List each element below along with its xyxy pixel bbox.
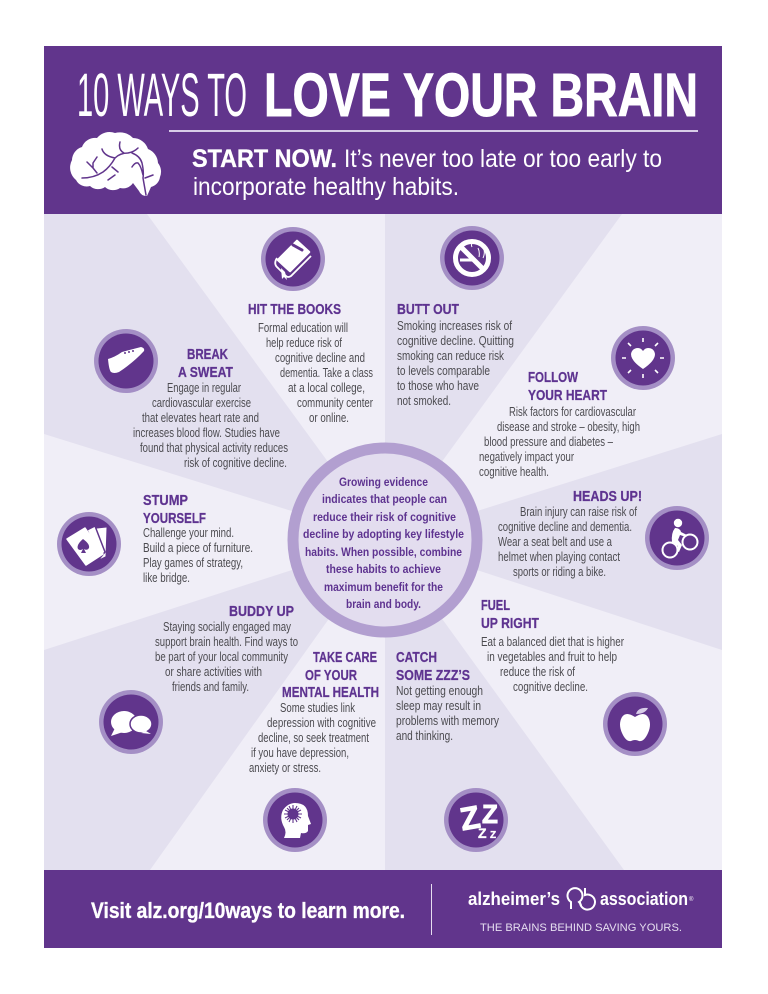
- center text: Growing evidence: [339, 477, 428, 489]
- body text: found that physical activity reduces: [140, 441, 288, 455]
- body text: that elevates heart rate and: [142, 411, 259, 425]
- heading: [178, 347, 233, 381]
- heading: STUMP: [143, 493, 188, 509]
- body text: anxiety or stress.: [249, 761, 321, 775]
- background sunburst panel: [44, 214, 722, 870]
- body text: Formal education will: [258, 321, 348, 335]
- body text: Not getting enough: [396, 684, 483, 698]
- logo: alzheimer's association: THE BRAINS BEHIND SAVING YOURS.: [480, 922, 682, 934]
- body text: Smoking increases risk of: [397, 319, 512, 333]
- body text: cognitive health.: [479, 465, 549, 479]
- icon: zzz: Z: [457, 799, 483, 837]
- icon: apple: [603, 692, 667, 756]
- center text: these habits to achieve: [326, 564, 441, 576]
- subtitle: [192, 145, 662, 201]
- body text: Brain injury can raise risk of: [520, 505, 637, 519]
- heading: BUTT OUT: [397, 302, 459, 318]
- subtitle: START NOW.: [192, 145, 337, 173]
- heading: MENTAL HEALTH: [282, 685, 379, 701]
- body text: in vegetables and fruit to help: [487, 650, 617, 664]
- body text: cognitive decline. Quitting: [397, 334, 514, 348]
- center text: decline by adopting key lifestyle: [303, 529, 464, 541]
- icon: zzz: Z: [490, 830, 496, 841]
- body text: helmet when playing contact: [498, 550, 620, 564]
- heading: [481, 598, 539, 632]
- panel: butt out: [397, 226, 514, 408]
- body text: [258, 321, 373, 425]
- body text: or share activities with: [165, 665, 262, 679]
- panel: stump yourself: [57, 493, 253, 585]
- body text: decline, so seek treatment: [258, 731, 369, 745]
- heading: HEADS UP!: [573, 489, 642, 505]
- body text: cognitive decline and dementia.: [498, 520, 632, 534]
- panel: follow your heart: [479, 326, 675, 479]
- body text: cardiovascular exercise: [152, 396, 251, 410]
- body text: [397, 319, 514, 408]
- body text: to levels comparable: [397, 364, 490, 378]
- body text: [249, 701, 376, 775]
- icon: head with burst: [263, 788, 327, 852]
- center text: reduce their risk of cognitive: [313, 512, 456, 524]
- icon: brain: [70, 132, 161, 196]
- body text: depression with cognitive: [267, 716, 376, 730]
- heading: BREAK: [187, 347, 228, 363]
- subtitle: It’s never too late or too early to: [344, 145, 662, 173]
- body text: cognitive decline and: [275, 351, 365, 365]
- heading: OF YOUR: [305, 668, 357, 684]
- panel: heads up: [498, 489, 709, 579]
- heading: CATCH: [396, 650, 437, 666]
- body text: [479, 405, 640, 479]
- icon: shoe: [94, 329, 158, 393]
- center text: habits. When possible, combine: [305, 547, 462, 559]
- heading: BUDDY UP: [229, 604, 294, 620]
- center text: [303, 477, 464, 611]
- body text: friends and family.: [172, 680, 249, 694]
- icon: playing cards: [57, 512, 121, 576]
- panel: buddy up: [99, 604, 298, 754]
- heading: SOME ZZZ’S: [396, 668, 470, 684]
- body text: [498, 505, 637, 579]
- body text: if you have depression,: [251, 746, 349, 760]
- center circle: [293, 448, 477, 632]
- body text: [133, 381, 288, 470]
- logo: alzheimer's association: [468, 888, 694, 934]
- heading: TAKE CARE: [313, 650, 377, 666]
- body text: community center: [297, 396, 373, 410]
- heading: HIT THE BOOKS: [248, 302, 341, 318]
- body text: risk of cognitive decline.: [184, 456, 287, 470]
- icon: zzz: [444, 788, 508, 852]
- body text: [481, 635, 624, 694]
- heading: A SWEAT: [178, 365, 233, 381]
- icon: cyclist: [645, 506, 709, 570]
- heading: FUEL: [481, 598, 510, 614]
- body text: to those who have: [397, 379, 479, 393]
- body text: reduce the risk of: [500, 665, 575, 679]
- logo: alzheimer's association: ®: [689, 896, 694, 903]
- icon: no smoking: [440, 226, 504, 290]
- center text: maximum benefit for the: [324, 582, 443, 594]
- body text: Some studies link: [280, 701, 356, 715]
- icon: book: [261, 227, 325, 291]
- heading: UP RIGHT: [481, 616, 539, 632]
- body text: [155, 620, 298, 694]
- body text: Risk factors for cardiovascular: [509, 405, 636, 419]
- heading: FOLLOW: [528, 370, 578, 386]
- body text: Staying socially engaged may: [163, 620, 292, 634]
- heading: [143, 493, 206, 527]
- heading: [528, 370, 607, 404]
- body text: Build a piece of furniture.: [143, 541, 253, 555]
- footer banner: [44, 870, 722, 948]
- body text: like bridge.: [143, 571, 190, 585]
- panel: center message: [293, 448, 477, 632]
- body text: and thinking.: [396, 729, 453, 743]
- body text: [396, 684, 500, 743]
- body text: sleep may result in: [396, 699, 481, 713]
- heading: YOUR HEART: [528, 388, 607, 404]
- body text: be part of your local community: [155, 650, 289, 664]
- header banner: [44, 46, 722, 214]
- panel: fuel up right: [481, 598, 667, 756]
- logo: alzheimer's association: association: [600, 889, 688, 909]
- center text: indicates that people can: [322, 494, 447, 506]
- body text: Eat a balanced diet that is higher: [481, 635, 624, 649]
- body text: sports or riding a bike.: [513, 565, 606, 579]
- panel: hit the books: [248, 227, 373, 425]
- body text: [143, 526, 253, 585]
- body text: dementia. Take a class: [280, 366, 373, 380]
- panel: break a sweat: [94, 329, 288, 470]
- icon: heart: [611, 326, 675, 390]
- body text: support brain health. Find ways to: [155, 635, 298, 649]
- body text: disease and stroke – obesity, high: [497, 420, 640, 434]
- heading: [282, 650, 379, 701]
- center text: brain and body.: [346, 599, 421, 611]
- subtitle: incorporate healthy habits.: [193, 173, 459, 201]
- body text: smoking can reduce risk: [397, 349, 505, 363]
- body text: Engage in regular: [167, 381, 241, 395]
- body text: Play games of strategy,: [143, 556, 243, 570]
- body text: Challenge your mind.: [143, 526, 234, 540]
- body text: blood pressure and diabetes –: [484, 435, 613, 449]
- icon: zzz: Z: [482, 799, 498, 829]
- body text: cognitive decline.: [513, 680, 588, 694]
- logo: alzheimer's association: alzheimer’s: [468, 889, 560, 909]
- body text: help reduce risk of: [266, 336, 342, 350]
- icon: speech bubbles: [99, 690, 163, 754]
- body text: or online.: [309, 411, 349, 425]
- body text: not smoked.: [397, 394, 451, 408]
- title: 10 WAYS TO: [77, 61, 247, 129]
- panel: take care of your mental health: [249, 650, 379, 852]
- heading: YOURSELF: [143, 511, 206, 527]
- panel: catch some zzz's: [396, 650, 508, 852]
- title: [77, 61, 698, 129]
- body text: problems with memory: [396, 714, 500, 728]
- body text: at a local college,: [288, 381, 365, 395]
- body text: increases blood flow. Studies have: [133, 426, 280, 440]
- call to action: Visit alz.org/10ways to learn more.: [91, 898, 405, 923]
- body text: negatively impact your: [479, 450, 574, 464]
- icon: zzz: Z: [478, 825, 487, 841]
- body text: Wear a seat belt and use a: [498, 535, 612, 549]
- heading: [396, 650, 470, 684]
